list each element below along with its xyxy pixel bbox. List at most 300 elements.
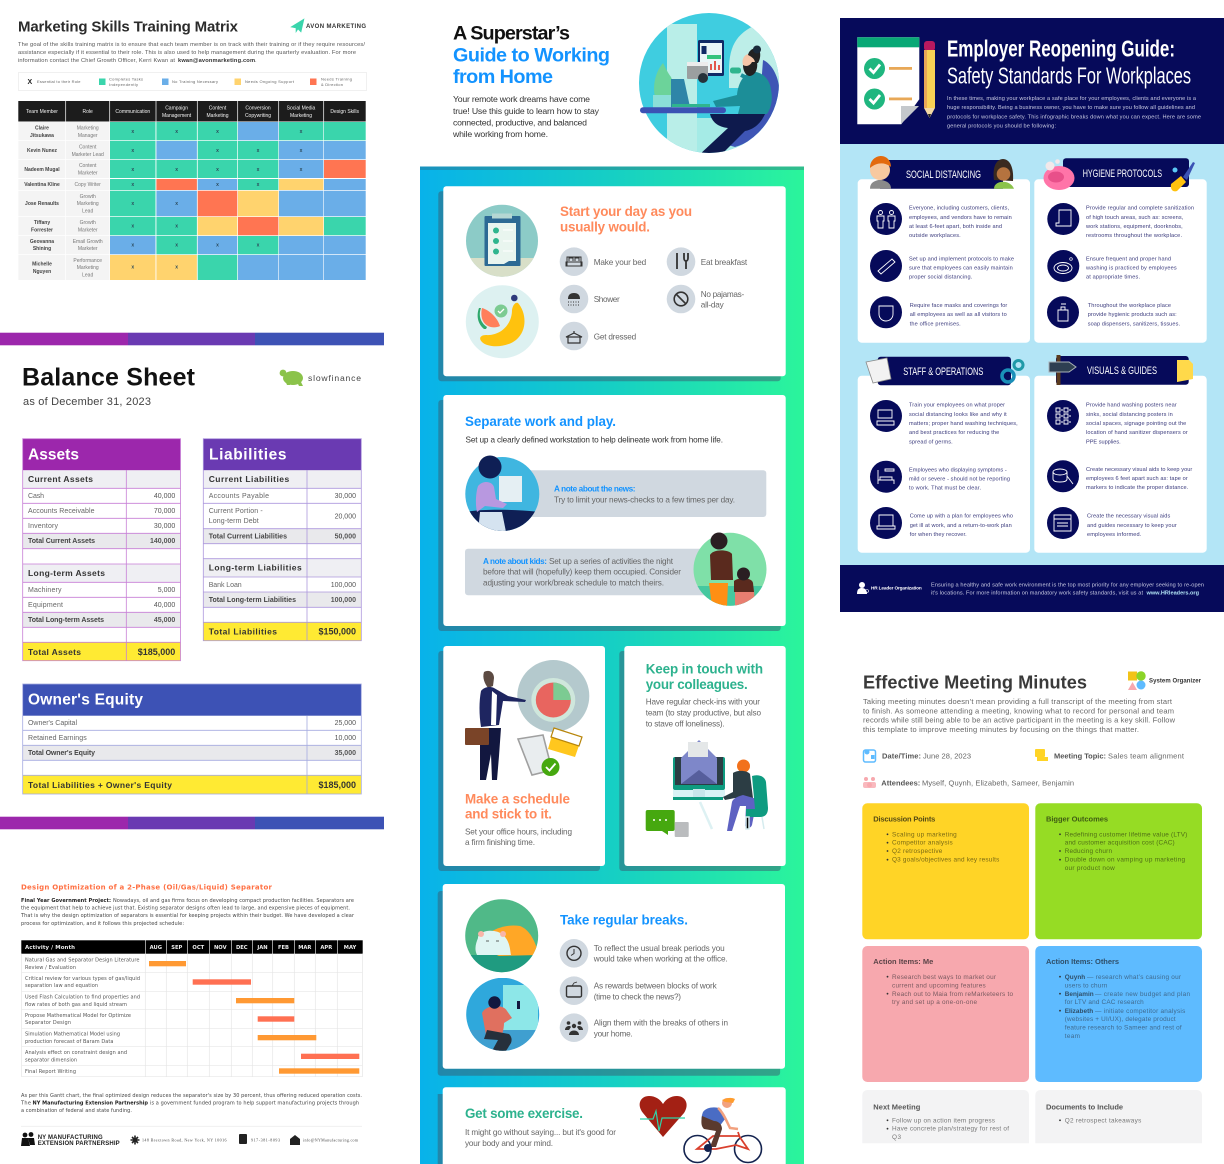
heading: separate work: Separate work and play. — [465, 414, 616, 429]
card: bigger outcomes: Redefining customer lifetime value (LTV) — [1065, 831, 1187, 838]
essential role marks: x — [131, 182, 134, 188]
item: social distancing 2: proper social distancing. — [909, 275, 973, 281]
text: header intro: In these times, making your workplace a safe place for your employees, clients and everyone is a — [947, 96, 1197, 102]
item: no pajamas: all-day — [701, 300, 725, 310]
item: hygiene 1: Provide regular and complete sanitization — [1086, 206, 1194, 212]
essential role marks: x — [131, 242, 134, 248]
note: news — [465, 456, 766, 532]
table: owner's equity: Total Owner's Equity — [28, 750, 95, 757]
heading: keep in touch — [646, 661, 763, 692]
item: visuals 3: employees informed. — [1087, 532, 1142, 538]
break items — [560, 939, 728, 1042]
item: social distancing 2: sure that employees can easily maintain — [909, 266, 1013, 272]
text: project intro: the equipment that help to achieve just that. Existing separator designs often lead to large, and expensive pieces of equipment. — [21, 906, 350, 912]
essential role marks: x — [257, 182, 260, 188]
table: liabilities: Current Portion - — [209, 508, 263, 515]
heading: start your day — [560, 204, 692, 234]
text: gantt conclusion: The — [20, 1101, 31, 1107]
meta: meeting topic: Meeting Topic: — [1054, 751, 1106, 760]
illustration: woman with clock and documents — [465, 660, 589, 780]
row labels: Lead — [82, 272, 93, 278]
text: gantt conclusion — [20, 1093, 362, 1114]
gantt activity labels: Review / Evaluation — [25, 965, 76, 971]
table header: Communication — [115, 109, 150, 115]
item: staff 1: and best practices for reducing the — [909, 430, 999, 436]
text: gantt conclusion: NY Manufacturing Extension Partnership — [32, 1101, 148, 1107]
item: get dressed — [560, 322, 637, 350]
gantt activity labels: Separator Design — [25, 1020, 71, 1026]
text: header intro: huge responsibility. Being a business owner, you have to make sure you follow all guidelines and — [947, 105, 1195, 111]
item: visuals 3: Create the necessary visual aids — [1087, 514, 1171, 520]
card: next meeting — [862, 1090, 1029, 1143]
table: owner's equity: 25,000 — [335, 720, 356, 727]
card: take regular breaks — [438, 884, 785, 1076]
text: footer message: it's locations. For more information on mandatory work safety standards, visit us at — [931, 591, 1143, 597]
item: visuals 2: Create necessary visual aids to keep your — [1086, 467, 1192, 473]
row labels: Lead — [82, 208, 93, 214]
card: discussion points: Competitor analysis — [892, 840, 953, 847]
card: separate work and play — [438, 395, 786, 631]
row labels: Marketing — [77, 265, 99, 271]
row labels: Shining — [33, 246, 51, 252]
essential role marks: x — [300, 129, 303, 135]
item: hygiene 1 — [1047, 203, 1194, 239]
text: meeting intro: records while still being able to be an active participant in the meeting is a key skill. Follow — [863, 716, 1176, 725]
card: bigger outcomes — [1035, 803, 1202, 939]
text: matrix intro: . — [255, 58, 257, 64]
card: action items me: try and set up a one-on-one — [892, 999, 977, 1006]
icon: phone — [239, 1134, 247, 1144]
card: action items others: — create new budget and plan — [1095, 991, 1190, 998]
text: office hours — [465, 827, 572, 847]
illustration: person on phone — [466, 978, 540, 1052]
heading: marketing matrix title: Marketing Skills Training Matrix — [18, 18, 239, 36]
card: next meeting: Q3 — [892, 1134, 901, 1141]
item: social distancing 3 — [870, 296, 1007, 328]
item: break periods: would take when working at the office. — [593, 955, 728, 964]
table: owner's equity: 10,000 — [335, 735, 356, 742]
row labels: Performance — [73, 258, 102, 264]
card: action items me: Action Items: Me — [873, 957, 933, 966]
row labels: Growth — [80, 220, 96, 226]
text: office hours: Set your office hours, including — [465, 827, 572, 836]
heading: start your day: usually would. — [560, 219, 650, 234]
table header: Conversion — [245, 106, 271, 112]
item: hygiene 1: restrooms throughout the workplace. — [1086, 233, 1182, 239]
panel: marketing skills training matrix — [18, 18, 366, 280]
gantt header: APR — [320, 945, 332, 951]
icon: email — [290, 1135, 300, 1145]
illustration: parent and child — [693, 532, 767, 608]
row labels: Tiffany — [34, 220, 50, 226]
heading: meeting minutes title: Effective Meeting Minutes — [863, 672, 1087, 692]
text: header intro — [947, 96, 1201, 129]
heading: keep in touch: your colleagues. — [646, 677, 748, 692]
gantt header: OCT — [192, 945, 205, 951]
illustration: heart with pulse — [640, 1096, 687, 1137]
item: staff 1 — [870, 400, 1018, 445]
legend — [18, 72, 366, 90]
gantt activity labels: production forecast of Baram Data — [25, 1039, 114, 1045]
gantt header: NOV — [214, 945, 227, 951]
illustration: woman reading — [465, 456, 540, 532]
item: social distancing 1: at least 6-feet apart, both inside and — [909, 224, 1002, 230]
text: meeting intro: this template to improve meeting minutes by focusing on the things that matter. — [863, 725, 1139, 734]
item: eat breakfast: Eat breakfast — [701, 258, 748, 267]
row labels: Jose Renaults — [25, 201, 59, 207]
logo: slowfinance — [280, 370, 361, 386]
item: visuals 1: sinks, social distancing posters in — [1086, 412, 1173, 418]
table header: Social Media — [287, 106, 316, 112]
item: social distancing 1: outside workplaces. — [909, 233, 961, 239]
item: hygiene 2: at appropriate times. — [1086, 275, 1140, 281]
gantt header: MAY — [344, 945, 356, 951]
card: get some exercise — [438, 1087, 786, 1164]
item: hygiene 2: washing is practiced by employees — [1085, 266, 1177, 272]
item: shower — [560, 285, 620, 313]
legend: Essential to their Role — [37, 79, 81, 84]
logo: Avon Marketing — [291, 19, 366, 32]
gantt header: JAN — [256, 945, 268, 951]
item: rewards: (time to check the news?) — [594, 993, 681, 1002]
row labels: Copy Writer — [75, 182, 101, 188]
row labels: Marketer Lead — [72, 152, 104, 158]
essential role marks: x — [175, 224, 178, 230]
card: start your day — [438, 186, 786, 381]
card: discussion points: Discussion Points — [873, 814, 935, 823]
illustration: pencil — [924, 41, 935, 118]
item: hygiene 3: Throughout the workplace place — [1088, 303, 1171, 309]
essential role marks: x — [175, 167, 178, 173]
table: assets — [23, 439, 181, 661]
item: visuals 3: and guides necessary to keep your — [1087, 523, 1177, 529]
item: visuals 1 — [1047, 400, 1188, 445]
essential role marks: x — [300, 167, 303, 173]
card: social distancing — [858, 156, 1030, 343]
text: guide intro: Your remote work dreams have come — [453, 94, 590, 104]
gantt activity labels: Natural Gas and Separator Design Literature — [25, 958, 140, 964]
card: next meeting: Have concrete plan/strategy for rest of — [892, 1126, 1009, 1133]
card: action items me: current and upcoming features — [892, 982, 986, 990]
heading: make a schedule: and stick to it. — [465, 807, 552, 822]
text: matrix intro: assistance especially if it essential to their role. This is also used to help management during the quarterly evaluation. For more — [18, 50, 356, 56]
heading: get some exercise: Get some exercise. — [465, 1106, 583, 1121]
panel: effective meeting minutes — [862, 671, 1202, 1143]
essential role marks: x — [131, 129, 134, 135]
meta: attendees: Attendees: — [881, 778, 920, 787]
table: liabilities: 50,000 — [335, 534, 356, 541]
card: action items others: team — [1065, 1033, 1080, 1040]
gantt activity labels: separation law and equation — [25, 983, 98, 989]
item: visuals 2: employees 6 feet apart such as: tape or — [1086, 476, 1188, 482]
meta: attendees: Myself, Quynh, Elizabeth, Sameer, Benjamin — [922, 778, 1074, 787]
icon: HR leader logo — [857, 582, 868, 594]
logo: System Organizer — [1128, 671, 1202, 690]
item: social distancing 3: all employees as well as all visitors to — [910, 312, 1007, 318]
section header: hygiene protocols — [1044, 158, 1195, 191]
card: action items others: feature research to Sameer and rest of — [1065, 1024, 1182, 1032]
row labels: Marketing — [77, 126, 99, 132]
item: hygiene 3: provide hygienic products such as: — [1088, 312, 1177, 318]
text: project intro: process for optimization, and it follows this projected schedule: — [21, 921, 184, 927]
card: action items others: for LTV and CAC research — [1065, 999, 1144, 1006]
item: staff 3 — [870, 507, 1013, 539]
text: exercise: It might go without saying... but it's good for — [465, 1128, 616, 1137]
text: project intro: Final Year Government Project: — [21, 898, 111, 904]
item: visuals 1: social spaces, signage pointing out the — [1086, 421, 1186, 427]
gantt activity labels: separator dimension — [25, 1057, 77, 1063]
text: office hours: a firm finishing time. — [465, 838, 535, 847]
essential role marks: x — [257, 167, 260, 173]
essential role marks: x — [131, 201, 134, 207]
text: meeting intro: Taking meeting minutes doesn’t mean providing a full transcript of the meeting from start — [863, 697, 1173, 706]
logo: Avon Marketing: AVON MARKETING — [306, 24, 366, 30]
essential role marks: x — [175, 129, 178, 135]
footer: NY manufacturing contact: EXTENSION PARTNERSHIP — [38, 1141, 120, 1147]
section header: social distancing: SOCIAL DISTANCING — [906, 169, 981, 181]
item: staff 3: for when they recover. — [910, 532, 967, 538]
card: visuals and guides — [1034, 355, 1207, 553]
item: social distancing 2: Set up and implement protocols to make — [909, 256, 1014, 262]
item: staff 3: get ill at work, and a return-to-work plan — [910, 523, 1012, 529]
row labels: Growth — [80, 194, 96, 200]
table: liabilities: Total Liabilities — [209, 626, 277, 636]
item: rewards — [560, 976, 718, 1005]
essential role marks: x — [131, 224, 134, 230]
panel: employer reopening guide — [840, 18, 1224, 612]
panel: work from home guide — [420, 13, 804, 1164]
item: staff 2: mild or severe - should not be reporting — [909, 476, 1010, 482]
item: visuals 1: PPE supplies. — [1086, 439, 1121, 445]
essential role marks: x — [131, 148, 134, 154]
card: action items me — [862, 946, 1029, 1082]
item: rewards: As rewards between blocks of work — [594, 982, 718, 991]
table: assets: Total Assets — [28, 647, 81, 657]
panel: balance sheet — [0, 333, 384, 829]
table header: Campaign — [165, 106, 188, 112]
item: social distancing 3: the office premises. — [910, 321, 961, 327]
table: assets: Inventory — [28, 523, 58, 530]
item: align breaks: your home. — [594, 1030, 633, 1039]
table: liabilities: $150,000 — [318, 626, 356, 636]
checklist items — [560, 247, 748, 350]
card: keep in touch — [619, 646, 786, 871]
table: liabilities: Long-term Liabilities — [209, 562, 302, 572]
text: matrix intro: kwan@avonmarketing.com — [178, 58, 255, 64]
legend: Independently — [109, 82, 138, 87]
table: liabilities: 30,000 — [335, 493, 356, 500]
legend: No Training Necessary — [172, 79, 218, 84]
row labels — [18, 122, 109, 280]
table: liabilities: Liabilities — [209, 446, 286, 464]
item: social distancing 2 — [870, 250, 1014, 282]
item: align breaks: Align them with the breaks of others in — [594, 1019, 728, 1028]
item: staff 1: spread of germs. — [909, 439, 953, 445]
card: bigger outcomes: our product now — [1065, 865, 1115, 872]
card: discussion points — [862, 803, 1029, 939]
icon: partnership logo — [21, 1132, 35, 1146]
text: project intro — [20, 898, 355, 927]
table: assets: Equipment — [28, 602, 63, 609]
table: liabilities: Long-term Debt — [209, 518, 259, 525]
heading: balance sheet title: Balance Sheet — [22, 364, 196, 392]
card: documents to include: Q2 retrospect takeaways — [1065, 1117, 1141, 1124]
heading: take regular breaks: Take regular breaks. — [560, 913, 688, 928]
card: next meeting: Follow up on action item progress — [892, 1117, 995, 1124]
row labels: Email Growth — [73, 239, 103, 245]
meta: date and time: June 28, 2023 — [923, 751, 971, 760]
item: visuals 1: Provide hand washing posters near — [1086, 403, 1177, 409]
note: news: Try to limit your news-checks to a few times per day. — [554, 495, 735, 504]
text: footer message: www.HRleaders.org — [1146, 591, 1200, 597]
card: action items me: Research best ways to market our — [892, 974, 997, 981]
row labels: Marketing — [77, 201, 99, 207]
heading: make a schedule: Make a schedule — [465, 791, 570, 806]
footer: NY manufacturing contact: 148 Brextown Road, New York, NY 10016 — [142, 1138, 226, 1144]
footer band — [840, 565, 1224, 612]
essential role marks: x — [257, 148, 260, 154]
text: date: as of December 31, 2023 — [23, 396, 151, 408]
table: liabilities: 100,000 — [331, 597, 356, 604]
item: staff 2: to work. That must be clear. — [909, 485, 981, 491]
item: shower: Shower — [594, 295, 620, 304]
item: hygiene 3: soap dispensers, sanitizers, tissues. — [1088, 321, 1180, 327]
gantt header: DEC — [236, 945, 248, 951]
section header: visuals and guides — [1049, 355, 1193, 385]
essential role marks: x — [216, 167, 219, 173]
note: kids: A note about kids: — [483, 557, 547, 566]
table: liabilities: Total Long-term Liabilities — [209, 597, 296, 604]
card: bigger outcomes: Double down on vamping up marketing — [1065, 857, 1185, 864]
legend: Needs Ongoing Support — [245, 79, 295, 84]
text: meeting intro: to finish. As someone attending a meeting, knowing what to record for personal and team — [863, 706, 1174, 715]
text: header intro: general protocols you should be following: — [947, 123, 1056, 129]
item: staff 1: social distancing looks like and why it — [909, 412, 1007, 418]
top color stripe — [0, 333, 384, 345]
row labels: Manager — [78, 133, 98, 139]
card: action items others: Action Items: Others — [1046, 957, 1119, 966]
essential role marks: x — [216, 129, 219, 135]
item: align breaks — [560, 1013, 728, 1042]
footer: NY manufacturing contact — [21, 1132, 359, 1147]
heading: keep in touch: Keep in touch with — [646, 661, 763, 676]
panel: gantt chart project — [20, 884, 363, 1147]
table: owner's equity — [23, 684, 361, 794]
table: assets: Total Current Assets — [28, 538, 95, 545]
item: social distancing 3: Require face masks and coverings for — [910, 303, 1007, 309]
table: liabilities: Current Liabilities — [209, 474, 289, 484]
card: hygiene protocols — [1034, 158, 1207, 343]
matrix colored cells — [110, 122, 366, 280]
card: action items others: — initiate competitor analysis — [1095, 1008, 1185, 1015]
section header: staff and operations: STAFF & OPERATIONS — [903, 366, 983, 378]
meta: date and time — [864, 750, 971, 762]
item: eat breakfast — [667, 247, 748, 276]
note: kids: Set up a series of activities the night — [549, 557, 674, 566]
item: staff 2: Employees who displaying symptoms - — [909, 467, 1007, 473]
heading: separator project: Design Optimization of a 2-Phase (Oil/Gas/Liquid) Separator — [21, 884, 273, 892]
row labels: Michelle — [32, 262, 52, 268]
gantt header: SEP — [171, 945, 183, 951]
item: staff 2 — [870, 461, 1010, 493]
illustration: video call at desk — [646, 740, 768, 837]
table: owner's equity: Total Liabilities + Owner's Equity — [28, 780, 172, 790]
essential role marks: x — [175, 264, 178, 270]
card: action items others: — research what’s causing our — [1087, 974, 1182, 981]
table: assets: 40,000 — [154, 493, 175, 500]
gantt bars — [149, 961, 359, 1074]
row labels: Geovanna — [30, 239, 54, 245]
essential role marks: x — [257, 242, 260, 248]
table header — [18, 101, 366, 122]
table: liabilities — [203, 439, 361, 641]
table: assets: Accounts Receivable — [28, 508, 95, 515]
row labels: Marketer — [78, 170, 98, 176]
table header: Management — [162, 113, 192, 119]
text: exercise: your body and your mind. — [465, 1139, 553, 1148]
heading: superstar guide title: A Superstar’s — [453, 22, 570, 44]
table: assets: 30,000 — [154, 523, 175, 530]
table: assets: 40,000 — [154, 602, 175, 609]
meta: date and time: Date/Time: — [882, 751, 921, 760]
gantt header: AUG — [150, 945, 162, 951]
item: break periods — [560, 939, 728, 968]
row labels: Kevin Nunez — [27, 148, 57, 154]
card: bigger outcomes: and customer acquisition cost (CAC) — [1065, 840, 1175, 847]
text: guide intro: true! Use this guide to learn how to stay — [453, 106, 600, 116]
footer: NY manufacturing contact: info@NYManufacturing.com — [303, 1138, 359, 1142]
section header: staff and operations — [866, 357, 1023, 385]
essential role marks: x — [216, 148, 219, 154]
text: workstation: Set up a clearly defined workstation to help delineate work from home life. — [466, 436, 723, 445]
guide background — [420, 166, 804, 1164]
gantt header: FEB — [278, 945, 289, 951]
table: liabilities: Bank Loan — [209, 582, 242, 589]
text: project intro: Nowadays, oil and gas firms focus on developing compact production facilities. Separators are — [113, 898, 354, 904]
footer band: HR Leader Organization — [871, 586, 922, 591]
item: staff 1: Train your employees on what proper — [909, 403, 1005, 409]
illustration: fruit — [466, 285, 539, 358]
legend: X — [28, 79, 32, 86]
text: matrix intro — [18, 42, 365, 64]
card: staff and operations — [858, 357, 1030, 553]
essential role marks: x — [300, 148, 303, 154]
card: action items others: users to churn — [1065, 982, 1108, 990]
legend: Needs Training — [321, 76, 352, 82]
text: gantt conclusion: As per this Gantt chart, the final optimized design reduces the separator's size by 30 percent, thus offering reduced operation costs. — [21, 1093, 362, 1099]
heading: make a schedule — [465, 791, 570, 822]
table: owner's equity: $185,000 — [318, 780, 356, 790]
table header: Role — [83, 109, 93, 115]
item: staff 1: matters; proper hand washing techniques, — [909, 421, 1018, 427]
card: bigger outcomes: Reducing churn — [1065, 848, 1112, 855]
illustration: clipboard checklist — [466, 204, 538, 278]
row labels: Content — [79, 144, 97, 150]
legend: & Direction — [321, 82, 343, 87]
icon: address — [130, 1136, 140, 1144]
table header: Team Member — [26, 109, 58, 115]
essential role marks: x — [216, 182, 219, 188]
table: owner's equity: 35,000 — [335, 750, 356, 757]
card: action items others: (websites + UI/UX), delegate product — [1065, 1016, 1176, 1023]
row labels: Forrester — [31, 228, 53, 234]
gantt header — [21, 940, 363, 954]
table header: Marketing — [290, 113, 312, 119]
table: assets: 70,000 — [154, 508, 175, 515]
legend: Completes Tasks — [109, 76, 143, 82]
gantt chart — [21, 940, 363, 1077]
item: get dressed: Get dressed — [594, 332, 637, 342]
